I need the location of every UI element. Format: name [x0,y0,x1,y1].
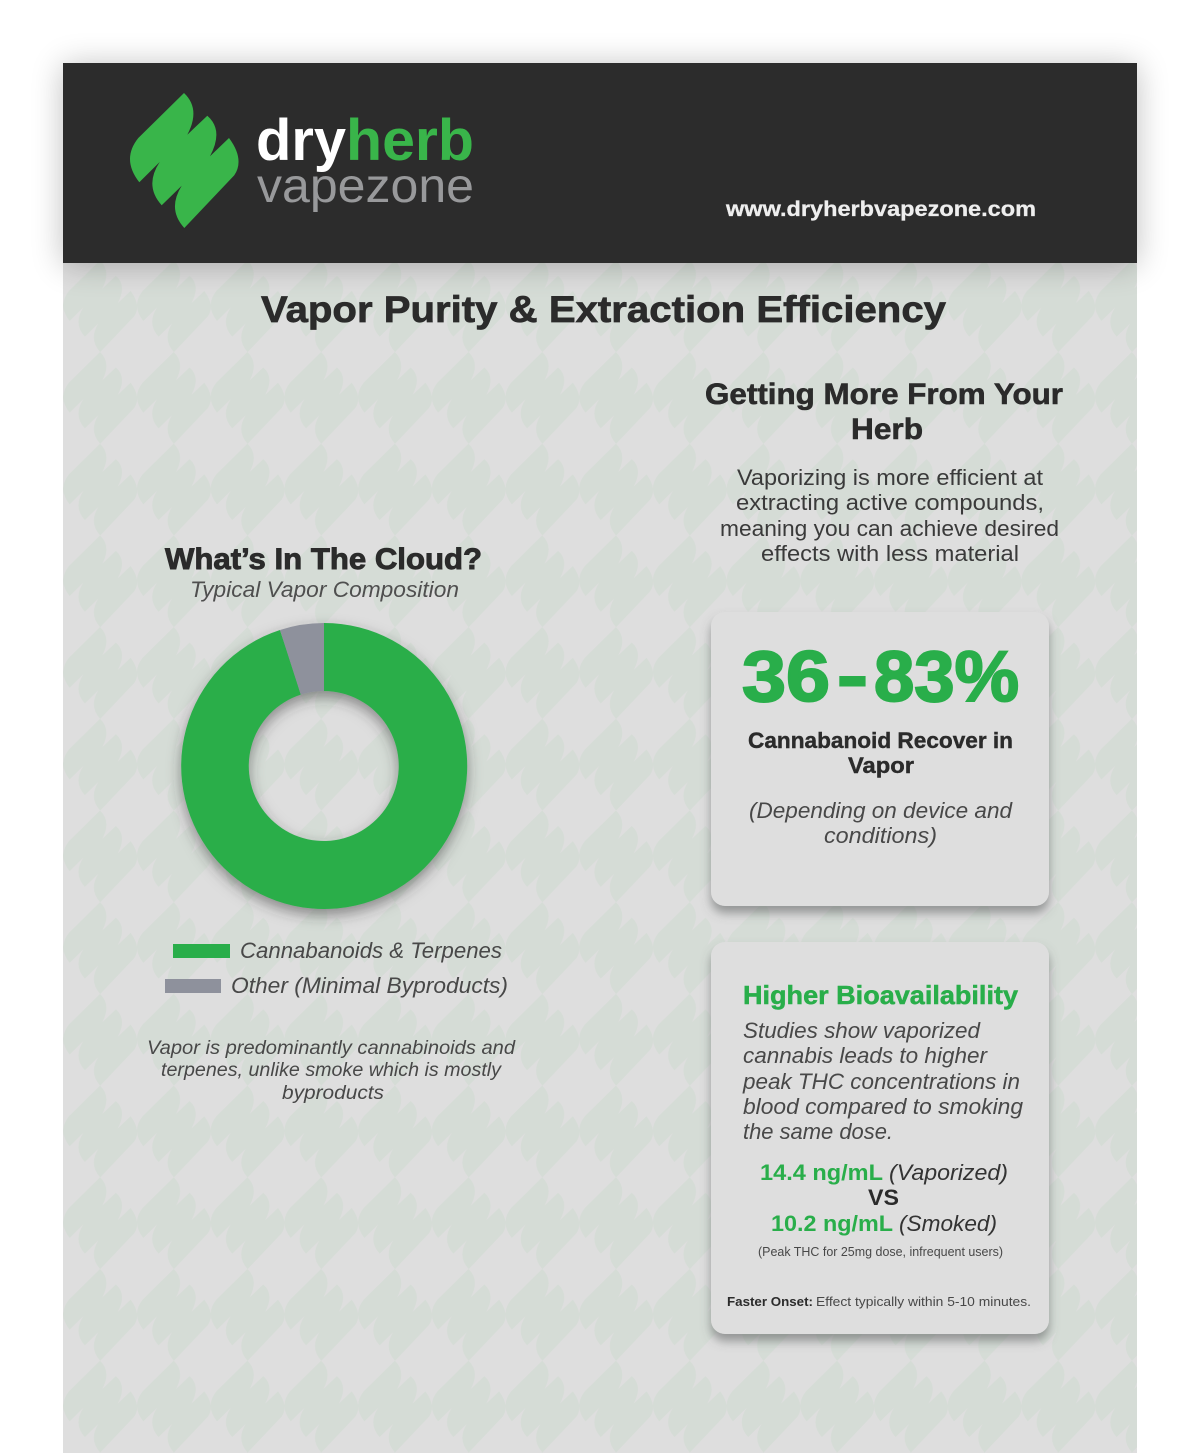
faster onset note: Faster Onset: [727,1294,813,1309]
text block: vapor note: Vapor is predominantly cannabinoids and [147,1038,517,1059]
card body text: peak THC concentrations in [742,1069,1020,1094]
heading: what's in the cloud: What’s In The Cloud? [165,543,482,576]
heading: getting more from your herb: Herb [851,413,923,446]
comparison figures: (Vaporized) [889,1160,1008,1185]
card body text: cannabis leads to higher [743,1043,989,1068]
stat label [748,728,1013,778]
logo wordmark: herb [346,108,474,173]
title: Vapor Purity & Extraction Efficiency [261,289,946,330]
chart legend: Cannabanoids & Terpenes [240,938,502,963]
chart legend [165,938,508,998]
text block: vapor note: terpenes, unlike smoke which is mostly [161,1060,503,1081]
logo wordmark: vapezone [257,160,474,213]
chart legend: Other (Minimal Byproducts) [231,973,508,998]
stat note: (Depending on device and [749,798,1013,823]
donut chart [181,623,467,909]
big stat: - [837,637,868,716]
big stat [742,637,1019,717]
big stat: 83% [874,638,1019,717]
card heading: Higher Bioavailability [743,980,1019,1010]
comparison figures: (Smoked) [899,1211,997,1236]
faster onset note: Effect typically within 5-10 minutes. [816,1294,1031,1309]
panel: header bar [63,63,1137,263]
text block: efficiency intro: meaning you can achieve desired [720,516,1059,541]
text block: efficiency intro: effects with less material [761,541,1019,566]
stat label: Cannabanoid Recover in [748,728,1013,753]
stat note: conditions) [824,823,937,848]
comparison figures: 14.4 ng/mL [760,1160,883,1185]
text block: efficiency intro: Vaporizing is more efficient at [737,465,1043,490]
heading: getting more from your herb: Getting More From Your [705,378,1063,411]
stat note [749,798,1013,848]
card body text: Studies show vaporized [743,1018,981,1043]
big stat: 36 [742,638,830,717]
card body text: the same dose. [743,1119,893,1144]
chart subtitle: Typical Vapor Composition [190,577,459,602]
footnote: (Peak THC for 25mg dose, infrequent users) [758,1245,1003,1259]
logo wordmark [256,108,474,213]
logo wordmark: dry [256,108,346,173]
comparison figures: 10.2 ng/mL [771,1211,893,1236]
website url: www.dryherbvapezone.com [725,198,1036,221]
text block: efficiency intro: extracting active compounds, [736,490,1044,515]
icon: flame logo [130,93,239,228]
text block: efficiency intro [720,465,1059,566]
faster onset note [727,1294,1031,1309]
text block: vapor note [147,1038,517,1104]
panel: cannabinoid recovery card [711,612,1049,906]
comparison figures: VS [868,1185,899,1210]
panel: page background with flame pattern [63,263,1137,1453]
panel: higher bioavailability card [711,942,1049,1334]
card body text [742,1018,1024,1144]
comparison figures [760,1160,1008,1236]
heading: getting more from your herb [705,378,1063,446]
text block: vapor note: byproducts [282,1083,385,1104]
header shadow [63,65,1137,265]
card body text: blood compared to smoking [743,1094,1024,1119]
stat label: Vapor [848,753,914,778]
